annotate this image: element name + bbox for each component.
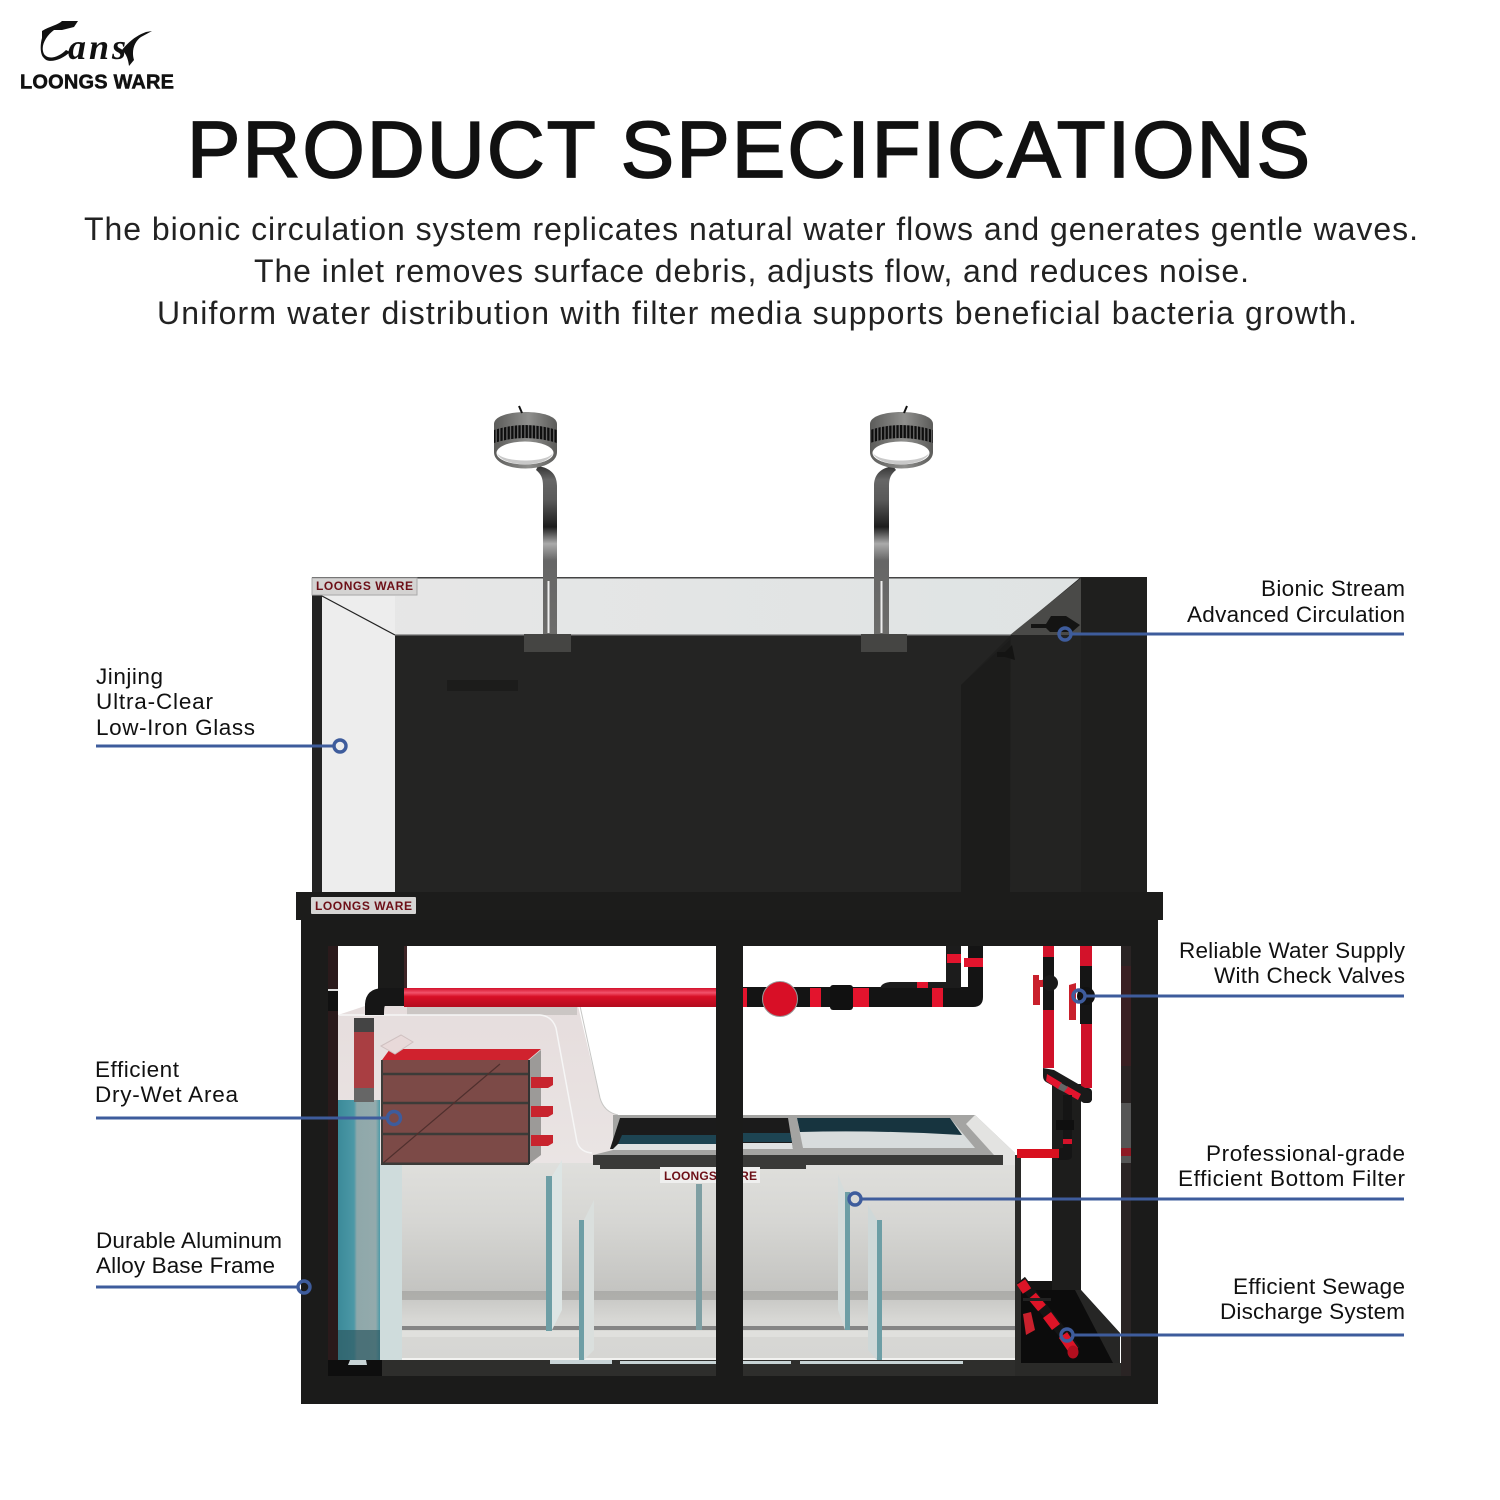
valve handles [1033, 975, 1043, 1005]
return plumbing [365, 946, 983, 1016]
callout: bottom filter [849, 1141, 1406, 1205]
sump shadow bands [380, 1291, 1015, 1300]
black rear panel [395, 635, 1015, 892]
callout: base frame: Alloy Base Frame [96, 1253, 275, 1278]
rear left post [378, 946, 407, 1016]
red union valve [762, 982, 798, 1016]
callout: glass: Ultra-Clear [96, 689, 214, 714]
callout: sewage: Efficient Sewage [1233, 1274, 1405, 1299]
lamp base [524, 634, 571, 652]
sump left chamber [338, 1006, 640, 1360]
black elbow [365, 988, 404, 1015]
red bands [743, 988, 747, 1007]
check valve plumbing [1017, 946, 1095, 1160]
callout: sewage [1061, 1274, 1405, 1341]
drain valve handle [1023, 1312, 1035, 1335]
sump brand plate: LOONGS WARE [664, 1169, 757, 1183]
drain pipe [1021, 1280, 1076, 1350]
callout: base frame [96, 1228, 310, 1293]
filter lid [381, 1035, 413, 1054]
filter front [382, 1060, 529, 1164]
intro line 2: The inlet removes surface debris, adjusts flow, and reduces noise. [254, 253, 1249, 289]
sewage discharge [1021, 1280, 1121, 1376]
left riser [1043, 946, 1054, 957]
dry-wet filter box [381, 1035, 553, 1165]
left glass pane [322, 596, 395, 892]
cabinet stand [296, 892, 1163, 1404]
open background [328, 946, 1131, 1376]
lamp head [870, 412, 933, 468]
callout: bionic stream: Advanced Circulation [1187, 602, 1405, 627]
callout: bottom filter: Professional-grade [1206, 1141, 1405, 1166]
horizontal return pipe [743, 946, 983, 1007]
callout: dry-wet area [95, 1057, 400, 1124]
callout: bottom filter: Efficient Bottom Filter [1178, 1166, 1406, 1191]
callout: sewage: Discharge System [1220, 1299, 1405, 1324]
stand frame [301, 920, 1158, 1404]
lamp base [861, 634, 907, 652]
intro text [84, 211, 1418, 331]
glass baffles [546, 1160, 882, 1360]
center post [716, 946, 743, 1376]
callout: glass: Low-Iron Glass [96, 715, 255, 740]
callout: bionic stream [1059, 576, 1405, 640]
red inner overflow [354, 1032, 374, 1092]
sump tank [328, 1006, 1021, 1376]
callout: dry-wet area: Efficient [95, 1057, 180, 1082]
intro line 1: The bionic circulation system replicates natural water flows and generates gentle waves. [84, 211, 1418, 247]
teal glass column [338, 1100, 380, 1360]
diagonal connector [1043, 1068, 1092, 1103]
feed to sump [1017, 1149, 1059, 1158]
title: PRODUCT SPECIFICATIONS [187, 105, 1310, 194]
callout: check valves: Reliable Water Supply [1179, 938, 1406, 963]
rear right strip [1121, 946, 1131, 1376]
sump lower body [338, 1163, 1015, 1360]
lamp arm [536, 466, 557, 635]
callout: bionic stream: Bionic Stream [1261, 576, 1405, 601]
callout: glass: Jinjing [96, 664, 163, 689]
filter drawer tabs [531, 1077, 553, 1146]
glass brand plate: LOONGS WARE [316, 579, 413, 593]
valve bodies [1042, 975, 1058, 991]
long red pipe [404, 988, 716, 1007]
intro line 3: Uniform water distribution with filter media supports beneficial bacteria growth. [157, 295, 1357, 331]
sump floor [328, 1360, 1021, 1376]
pipe coupling [830, 985, 853, 1010]
logo [20, 21, 174, 94]
lamp left [494, 406, 571, 652]
top glass band [312, 577, 1082, 635]
tray [1021, 1281, 1120, 1376]
rear right post [1052, 1084, 1081, 1294]
callout: check valves: With Check Valves [1214, 963, 1405, 988]
rear left strip [328, 946, 338, 1376]
callout: glass [96, 664, 346, 752]
callout: base frame: Durable Aluminum [96, 1228, 282, 1253]
lamp arm [874, 466, 896, 635]
bottom filter top rim [593, 1115, 1021, 1376]
stand top beam [296, 892, 1163, 920]
right riser [1080, 946, 1092, 966]
aquarium upper tank [312, 577, 1147, 892]
lamp head [494, 412, 557, 468]
logo script: ans [68, 27, 126, 67]
left dark edge [312, 595, 322, 892]
filter top [382, 1049, 541, 1060]
stand brand plate: LOONGS WARE [315, 899, 412, 913]
callout: check valves [1073, 938, 1406, 1002]
callout: dry-wet area: Dry-Wet Area [95, 1082, 238, 1107]
overflow box [961, 577, 1147, 892]
drop pipe [1063, 1095, 1072, 1148]
logo wordmark: LOONGS WARE [20, 72, 174, 94]
lamp right [861, 406, 933, 652]
logo dragon accent [41, 21, 152, 66]
return nozzles [997, 616, 1080, 660]
filter side [529, 1050, 541, 1164]
second upper pipe [880, 946, 961, 990]
